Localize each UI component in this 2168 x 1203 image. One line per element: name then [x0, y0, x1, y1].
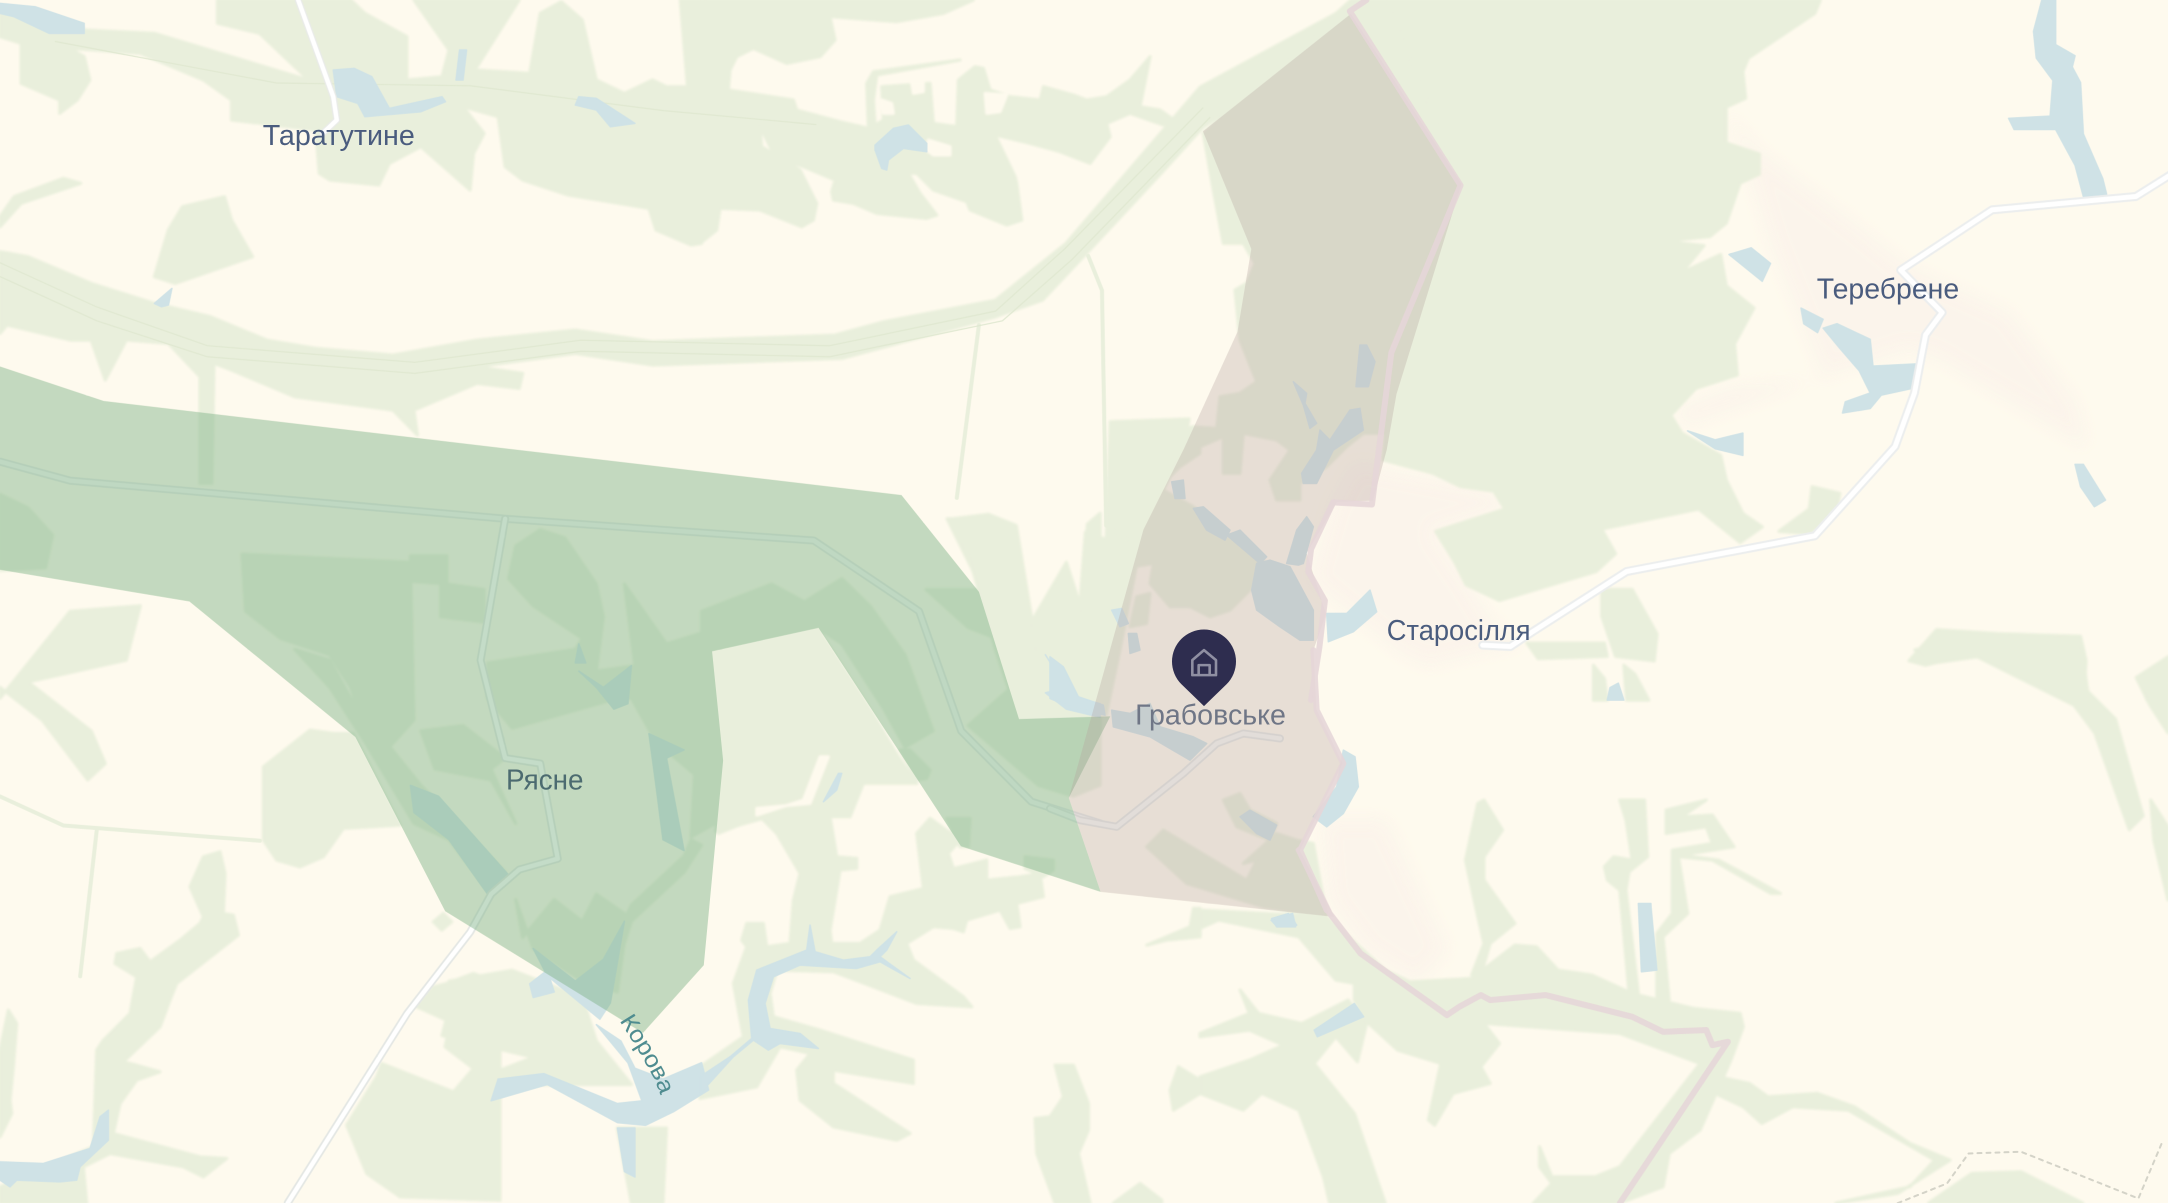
thin tree lines	[0, 256, 1127, 976]
label: Корова river: Корова	[620, 1014, 670, 1096]
water: north-west ponds	[0, 3, 635, 307]
occupied territory: green polygon	[0, 366, 1110, 1033]
dashed administrative line	[1898, 1140, 2163, 1203]
label: Таратутине: Таратутине	[263, 120, 415, 152]
water: north-centre pond	[875, 125, 927, 170]
water: south-east ponds	[1271, 903, 1657, 1037]
road: east from Starosillia to Terebrene	[1483, 165, 2168, 647]
forest: central and southern	[0, 494, 1100, 1203]
water: ponds in the pink zone north	[1293, 345, 1375, 483]
water: Korova river and ponds	[410, 644, 1100, 1177]
forest: south-east river valleys	[1200, 800, 2168, 1203]
road: Taratutyne	[298, 0, 337, 133]
water: Korova east arm	[700, 773, 910, 1093]
forest west of the pink zone	[954, 419, 1189, 719]
water: south-west pond	[0, 1110, 108, 1187]
road: west through Hrabovske	[0, 462, 1100, 1203]
forest: inside the pink zone, north	[1163, 0, 1460, 500]
label: Теребрене: Теребрене	[1817, 274, 1959, 306]
pin body	[1172, 630, 1236, 706]
forest: far south-east	[1915, 636, 2143, 830]
forest strip along the railway	[0, 252, 996, 483]
label: Рясне: Рясне	[506, 765, 583, 797]
label: Старосілля: Старосілля	[1387, 615, 1531, 647]
label: Грабовське: Грабовське	[1135, 700, 1286, 732]
forest strip: north-east extension	[996, 7, 1362, 317]
contour lines	[0, 41, 1210, 373]
map pin: Hrabovske	[1172, 630, 1236, 706]
contested zone: pink polygon	[1069, 14, 1461, 917]
forest: inside the pink zone, south	[1130, 490, 1327, 917]
forest: north-centre around the pond	[700, 0, 1172, 243]
border line	[1299, 0, 1728, 1203]
forest: south-centre valleys	[700, 740, 1200, 1203]
forest: top ribbon	[680, 0, 705, 180]
border: south section	[1299, 850, 1728, 1203]
forest: eastern massif	[1361, 0, 2168, 700]
road: Hrabovske village street	[1050, 733, 1280, 827]
forest: north-west	[0, 0, 996, 483]
forest: south-west	[0, 730, 500, 1203]
border: central section	[1300, 650, 1343, 910]
icon: house	[1192, 650, 1216, 675]
settlement tint areas	[1311, 112, 2086, 982]
water: eastern ponds	[1607, 0, 2107, 700]
water: Hrabovske ponds	[1050, 480, 1377, 927]
border: north section	[1308, 0, 1461, 700]
